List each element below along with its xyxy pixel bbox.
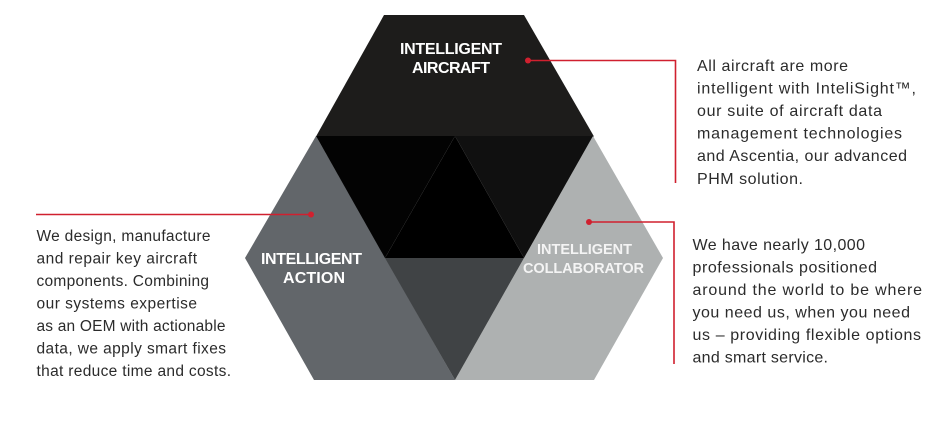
text block: aircraft description: management technologies [697, 126, 902, 142]
text block: action description: and repair key aircraft [36, 250, 198, 268]
panel: lower dark triangle overlap [385, 258, 524, 380]
text block: action description: We design, manufacture [36, 228, 210, 245]
panel: intelligent collaborator segment [455, 136, 663, 380]
text block: action description: components. Combining [36, 273, 209, 290]
callout line: action [36, 212, 314, 218]
text block: aircraft description [697, 58, 916, 188]
text block: collaborator description: We have nearly 10,000 [692, 237, 865, 254]
heading: intelligent action [261, 251, 362, 287]
text block: action description: data, we apply smart fixes [36, 340, 226, 358]
heading: intelligent aircraft: AIRCRAFT [412, 60, 490, 77]
text block: action description [36, 228, 231, 380]
text block: aircraft description: and Ascentia, our advanced [697, 148, 907, 165]
text block: collaborator description [692, 237, 922, 366]
text block: action description: as an OEM with actionable [36, 318, 226, 335]
text block: aircraft description: All aircraft are more [697, 58, 848, 75]
callout line: collaborator [586, 219, 674, 364]
panel: intelligent action segment [245, 136, 455, 380]
heading: intelligent collaborator: INTELLIGENT [537, 242, 632, 258]
text block: aircraft description: PHM solution. [697, 171, 803, 188]
text block: aircraft description: intelligent with InteliSight™, [697, 80, 916, 98]
text block: collaborator description: you need us, when you need [692, 304, 910, 322]
heading: intelligent action: ACTION [283, 270, 345, 287]
panel: central black overlap [316, 136, 593, 258]
panel: intelligent aircraft segment [316, 15, 594, 136]
callout line: aircraft [525, 58, 676, 183]
text block: collaborator description: and smart service. [692, 350, 828, 366]
text block: collaborator description: us – providing flexible options [692, 327, 921, 344]
text block: collaborator description: professionals positioned [692, 260, 877, 276]
text block: action description: that reduce time and costs. [36, 363, 231, 380]
heading: intelligent collaborator: COLLABORATOR [523, 261, 645, 277]
text block: aircraft description: our suite of aircraft data [697, 103, 882, 120]
heading: intelligent action: INTELLIGENT [261, 251, 362, 268]
text block: action description: our systems expertise [36, 296, 197, 312]
heading: intelligent aircraft [400, 41, 502, 77]
heading: intelligent collaborator [523, 242, 645, 277]
text block: collaborator description: around the world to be where [692, 282, 922, 299]
heading: intelligent aircraft: INTELLIGENT [400, 41, 502, 58]
